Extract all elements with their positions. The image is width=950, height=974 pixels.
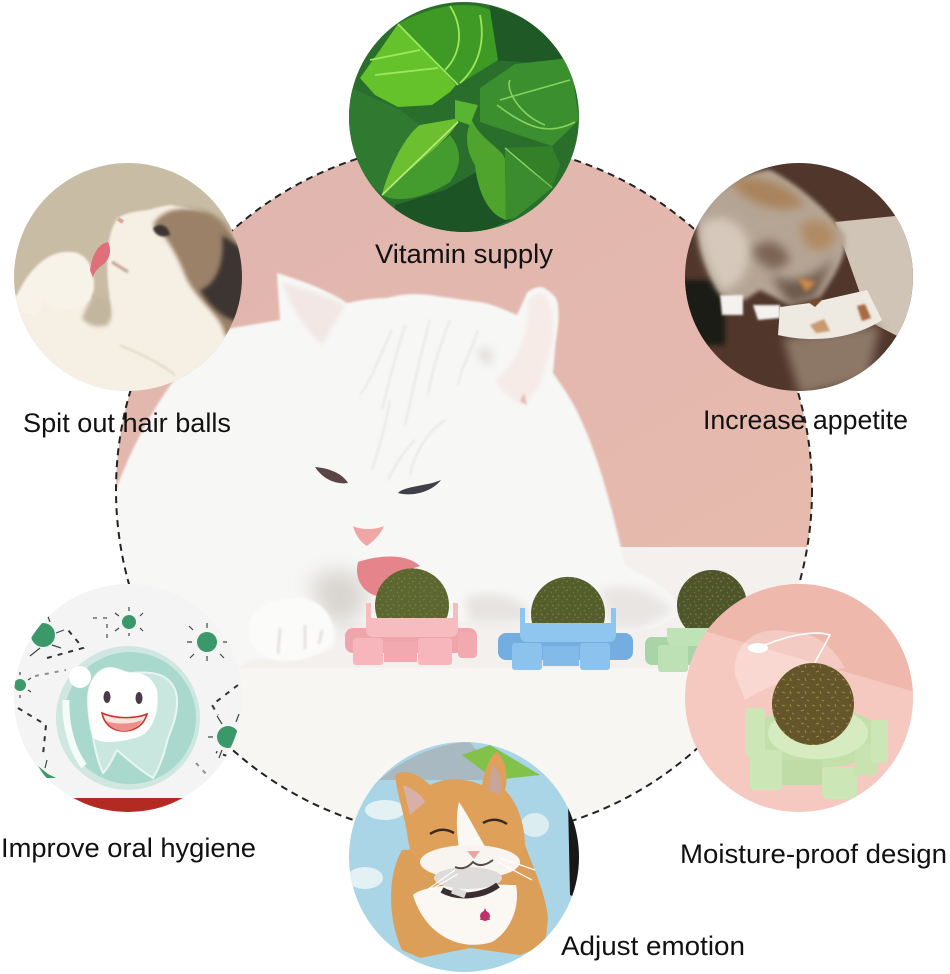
cat head xyxy=(395,752,535,895)
main photo: white cat licking catnip balls xyxy=(110,140,820,848)
pink ball holder xyxy=(345,568,477,665)
leaf: lower left xyxy=(382,118,460,199)
label: improve oral hygiene: Improve oral hygiene xyxy=(1,833,256,863)
leaf: lower centre xyxy=(455,100,552,220)
cat body xyxy=(391,845,548,958)
leaf: right xyxy=(480,58,579,188)
white cat body xyxy=(112,273,680,668)
cat eyes xyxy=(315,467,441,494)
illustration: tooth with germs xyxy=(14,584,240,812)
cat nose and tongue xyxy=(353,526,420,596)
photo: smiling orange cat on blanket xyxy=(345,738,585,974)
collar and bell xyxy=(442,885,498,921)
tooth xyxy=(88,668,177,778)
photo: mint leaves xyxy=(349,2,579,232)
dashed main circle outline xyxy=(116,142,812,838)
label: moisture-proof design: Moisture-proof design xyxy=(680,839,947,869)
label: adjust emotion: Adjust emotion xyxy=(561,931,745,961)
label: increase appetite: Increase appetite xyxy=(703,405,908,435)
photo: cat licking, spit out hair balls xyxy=(10,160,250,395)
photo: cat eating from bowl xyxy=(680,160,920,395)
transparent dome xyxy=(735,630,845,700)
label: spit out hair balls: Spit out hair balls xyxy=(23,408,231,438)
cat left paw xyxy=(276,600,333,654)
green ball holder xyxy=(645,570,747,672)
label: vitamin supply: Vitamin supply xyxy=(375,239,554,269)
gear holder xyxy=(745,707,888,799)
catnip ball xyxy=(772,663,854,745)
germs xyxy=(14,607,239,780)
photo: moisture-proof ball with dome xyxy=(680,580,920,820)
blue ball holder xyxy=(498,577,633,670)
leaf: top left xyxy=(360,5,498,107)
